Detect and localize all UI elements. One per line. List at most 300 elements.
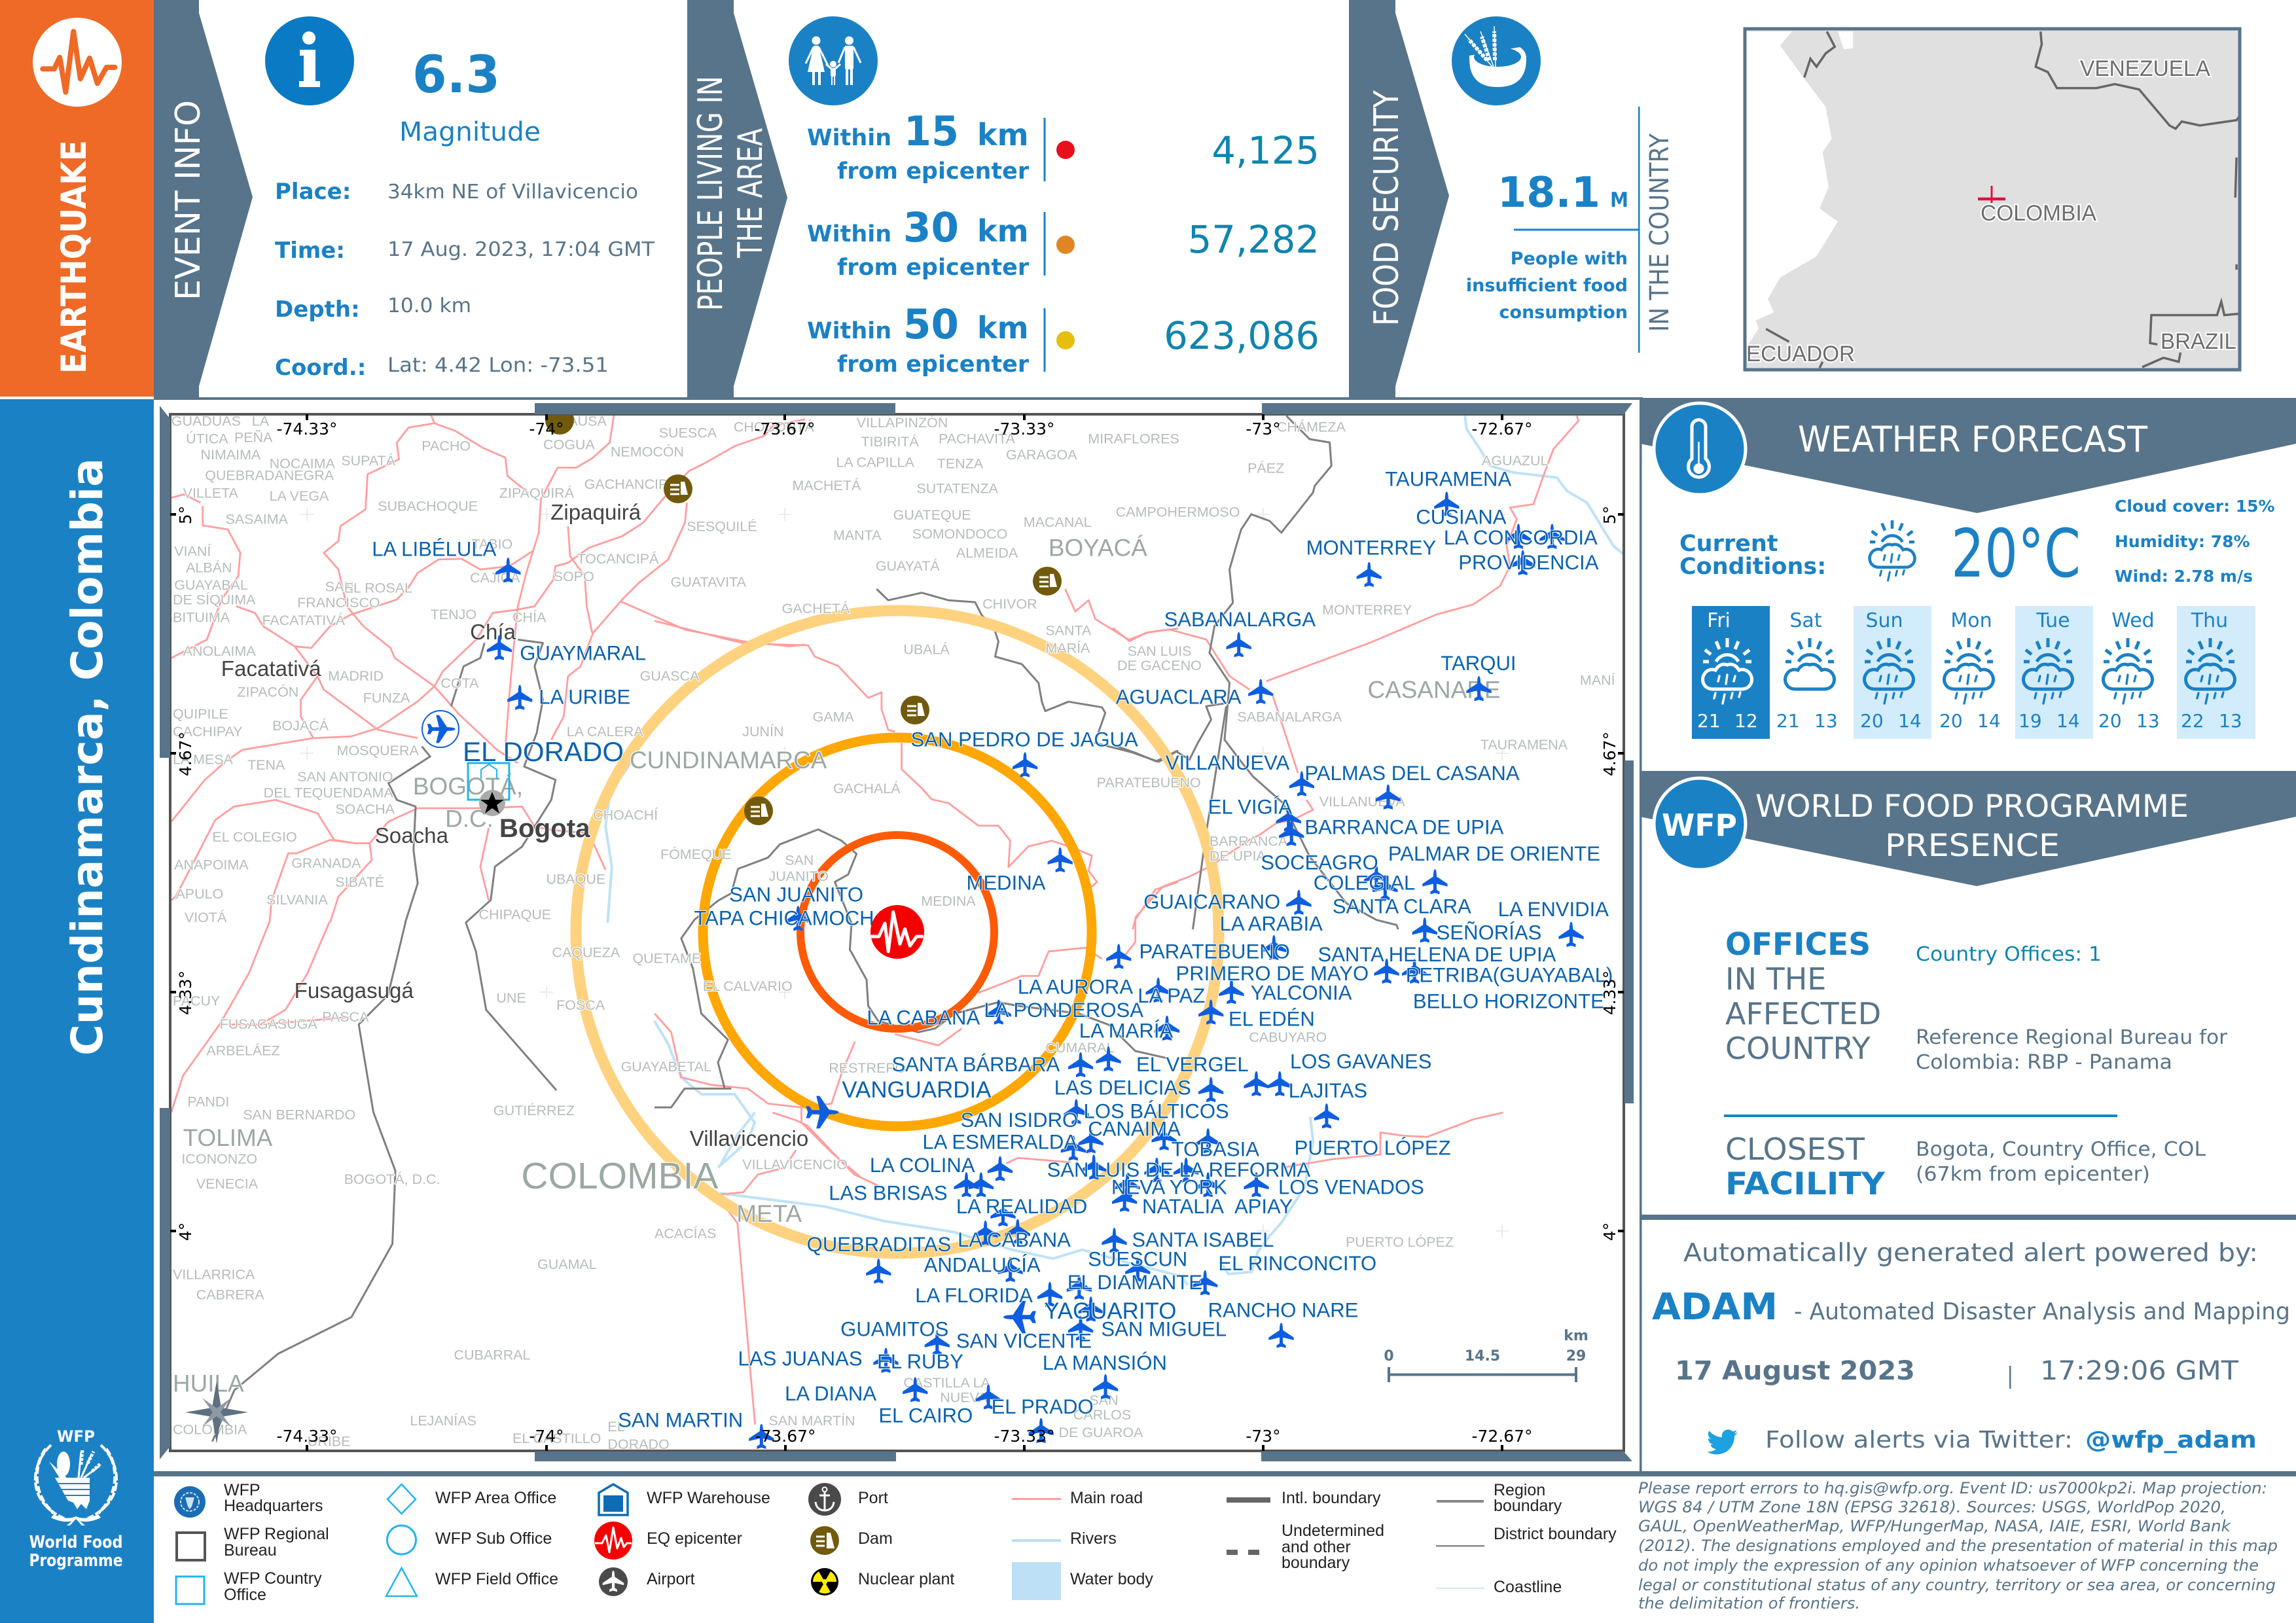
- current conditions label: Current: [1679, 531, 1778, 557]
- map labels: airports: LOS BÁLTICOS: [1084, 1099, 1229, 1122]
- food insecure value: 18.1: [1498, 169, 1600, 217]
- scale bar: 14.5: [1465, 1348, 1500, 1364]
- legend: water body: [1012, 1562, 1153, 1600]
- legend: WFP country office: [176, 1569, 322, 1604]
- roads, boundaries and rivers: centre: [655, 589, 1178, 1178]
- map labels: municipalities: ICONONZO: [181, 1151, 257, 1167]
- map labels: municipalities: SAN ANTONIO: [297, 769, 393, 785]
- map labels: airports: EL VERGEL: [1136, 1053, 1249, 1076]
- map labels: municipalities: GUTIÉRREZ: [493, 1102, 575, 1118]
- legend: WFP regional bureau: Bureau: [224, 1541, 277, 1560]
- panel: earthquake banner: [0, 0, 154, 397]
- heading banner: WFP presence: PRESENCE: [1885, 828, 2060, 864]
- map labels: municipalities: SAN MARTÍN: [769, 1412, 855, 1429]
- legend: undetermined boundary: [1227, 1522, 1384, 1572]
- map labels: municipalities: CHIVOR: [982, 596, 1037, 612]
- map labels: municipalities: PACHO: [422, 438, 471, 454]
- map labels: municipalities: RESTREPO: [829, 1060, 906, 1076]
- map labels: airports: LOS VENADOS: [1278, 1176, 1424, 1199]
- row: within 15 km: 4,125: [1211, 129, 1319, 173]
- map labels: municipalities: PÁEZ: [1247, 459, 1284, 476]
- map labels: municipalities: CAQUEZA: [552, 944, 620, 960]
- row: within 50 km: 623,086: [1164, 314, 1319, 358]
- map labels: municipalities: GUATAVITA: [671, 575, 747, 590]
- event details: Time:: [275, 238, 345, 264]
- map labels: municipalities: FACATATIVÁ: [262, 612, 346, 628]
- roads, boundaries and rivers: northwest: [171, 415, 805, 923]
- map labels: regions: HUILA: [173, 1370, 244, 1397]
- map labels: municipalities: ANOLAIMA: [183, 643, 256, 659]
- closest facility text: Bogota, Country Office, COL: [1916, 1138, 2206, 1161]
- map labels: airports: LA CABANA: [958, 1228, 1071, 1251]
- map labels: municipalities: SUBACHOQUE: [378, 498, 478, 514]
- legend: rivers: Rivers: [1070, 1529, 1117, 1548]
- coordinate ticks and labels: -73.67°: [754, 419, 816, 438]
- map labels: airports: ANDALUCÍA: [924, 1253, 1041, 1276]
- map labels: airports: LA URIBE: [539, 686, 630, 709]
- map labels: municipalities: CHÍA: [512, 609, 547, 625]
- text: follow on twitter: Follow alerts via Twitter:: [1765, 1427, 2073, 1454]
- map labels: airports: PARATEBUENO: [1139, 940, 1290, 963]
- map labels: municipalities: [171, 414, 1615, 1452]
- map labels: airports: SAN LUIS DE LA REFORMA: [1047, 1158, 1310, 1181]
- forecast: Wednesday: 20: [2098, 710, 2122, 732]
- map labels: regions: D.C.: [445, 805, 493, 832]
- map labels: municipalities: GUAYATÁ: [876, 558, 940, 574]
- map labels: regions: BOGOTÁ,: [413, 773, 523, 800]
- heading: closest facility: CLOSEST: [1725, 1132, 1865, 1167]
- row: within 15 km: [807, 107, 1319, 185]
- legend: airport: [599, 1567, 695, 1596]
- forecast: Friday: [1692, 606, 1770, 739]
- forecast: Wednesday: [2098, 609, 2160, 732]
- map labels: municipalities: SAN: [325, 579, 354, 594]
- coordinate ticks and labels: -73°: [1246, 1427, 1281, 1446]
- legend: region boundary: Region: [1494, 1481, 1545, 1499]
- map labels: airports: LA ESMERALDA: [922, 1130, 1077, 1153]
- forecast: Tuesday: 19: [2018, 710, 2042, 732]
- row: within 50 km: 50: [903, 300, 959, 348]
- map labels: municipalities: BITUIMA: [173, 609, 230, 625]
- legend: WFP area office: [387, 1484, 556, 1514]
- map labels: airports: PETRIBA(GUAYABAL): [1406, 963, 1613, 986]
- disclaimer text: WGS 84 / UTM Zone 18N (EPSG 32618). Sources: USGS, WorldPop 2020,: [1638, 1498, 2226, 1516]
- map labels: municipalities: DE GUAROA: [1058, 1425, 1143, 1440]
- row: within 30 km: 57,282: [1188, 218, 1319, 262]
- map labels: towns: Facatativá: [221, 657, 321, 681]
- inset location map: VENEZUELA: [2080, 56, 2210, 81]
- map labels: municipalities: CACHIPAY: [173, 724, 243, 740]
- map labels: municipalities: GUAMAL: [537, 1257, 597, 1272]
- disclaimer text: the delimitation of frontiers.: [1638, 1594, 1860, 1613]
- map labels: municipalities: CABRERA: [196, 1287, 264, 1303]
- map labels: airports: EL RUBY: [877, 1350, 963, 1373]
- map labels: airports: CANAIMA: [1088, 1117, 1181, 1140]
- event details: Coord.:: [275, 355, 366, 381]
- panel: weather forecast: [1640, 398, 2296, 739]
- heading: offices in the affected country: [1725, 927, 1881, 1066]
- scale bar: 29: [1566, 1348, 1586, 1364]
- map labels: municipalities: ZIPACÓN: [237, 683, 298, 700]
- map labels: municipalities: GUATEQUE: [893, 507, 971, 523]
- map labels: airports: VILLANUEVA: [1166, 751, 1290, 774]
- map labels: airports: BARRANCA DE UPIA: [1304, 816, 1504, 839]
- inset location map: COLOMBIA: [1981, 201, 2096, 226]
- map labels: municipalities: FÓMEQUE: [660, 846, 732, 863]
- map labels: municipalities: TOCANCIPÁ: [577, 550, 659, 567]
- map labels: airports: EL DIAMANTE: [1067, 1271, 1202, 1294]
- roads and boundaries: southwest: [171, 922, 556, 1442]
- map labels: municipalities: PEÑA: [234, 429, 273, 445]
- food insecure description: People with: [1511, 249, 1628, 269]
- map labels: municipalities: EL CASTILLO: [512, 1431, 601, 1446]
- map labels: municipalities: UBALÁ: [903, 641, 950, 658]
- map labels: regions: CASANARE: [1368, 677, 1501, 704]
- map labels: airports: SAN MARTIN: [618, 1408, 743, 1431]
- map labels: municipalities: VILLETA: [183, 485, 239, 501]
- text: time: 17:29:06 GMT: [2040, 1356, 2239, 1386]
- map labels: municipalities: PASCA: [322, 1009, 369, 1025]
- row: within 30 km: 30: [903, 204, 959, 251]
- legend: WFP regional bureau: WFP Regional: [224, 1525, 329, 1543]
- map labels: municipalities: PACUY: [173, 993, 220, 1008]
- legend: port: Port: [858, 1489, 888, 1507]
- map labels: airports: GUAMITOS: [840, 1318, 948, 1341]
- heading: people living in the area: [691, 76, 770, 311]
- legend: rivers: [1012, 1529, 1117, 1548]
- text: date: 17 August 2023: [1675, 1356, 1915, 1386]
- heading: food security: FOOD SECURITY: [1367, 90, 1407, 326]
- weather details: Wind: 2.78 m/s: [2115, 567, 2253, 586]
- legend: region boundary: boundary: [1494, 1497, 1562, 1515]
- map labels: airports: [372, 467, 1613, 1431]
- map labels: airports: SANTA ISABEL: [1132, 1228, 1274, 1251]
- map labels: airports: NEVA YORK: [1111, 1176, 1227, 1199]
- label: in the country: IN THE COUNTRY: [1645, 134, 1675, 332]
- coordinate ticks and labels: -73.67°: [755, 1427, 816, 1446]
- panel: people living in the area: [687, 0, 1319, 397]
- row: within 30 km: Within: [807, 221, 891, 247]
- coordinate ticks and labels: 4.33°: [176, 971, 195, 1015]
- map labels: municipalities: UBAQUE: [546, 872, 605, 887]
- legend: main road: Main road: [1070, 1489, 1143, 1507]
- legend: WFP field office: WFP Field Office: [435, 1570, 558, 1588]
- legend: WFP warehouse: WFP Warehouse: [647, 1489, 770, 1507]
- logo: World Food Programme: WFP: [57, 1427, 95, 1446]
- map labels: municipalities: CUMARAL: [1045, 1040, 1114, 1056]
- forecast: Monday: 14: [1977, 710, 2001, 732]
- map labels: airports: LA PONDEROSA: [984, 999, 1143, 1022]
- map labels: airports: PRIMERO DE MAYO: [1175, 962, 1369, 985]
- forecast: Saturday: [1776, 609, 1838, 732]
- map labels: municipalities: NEMOCÓN: [611, 444, 684, 460]
- coordinate ticks and labels: -73.33°: [994, 419, 1055, 438]
- map labels: airports: CUSIANA: [1416, 506, 1507, 529]
- map labels: airports: SEÑORÍAS: [1437, 921, 1541, 944]
- map labels: towns: [221, 501, 808, 1151]
- forecast: Monday: 20: [1939, 710, 1963, 732]
- map labels: towns: Fusagasugá: [295, 979, 414, 1003]
- map labels: municipalities: PANDI: [187, 1094, 229, 1110]
- map labels: airports: GUAYMARAL: [520, 642, 646, 665]
- map labels: municipalities: MANTA: [833, 527, 882, 543]
- legend: main road: [1012, 1489, 1143, 1507]
- map labels: airports: NATALIA: [1142, 1195, 1224, 1218]
- panel: ADAM alert: [1652, 1238, 2290, 1454]
- map labels: municipalities: LA CALERA: [567, 724, 643, 740]
- heading: earthquake: EARTHQUAKE: [54, 140, 94, 374]
- icon: current weather: [1870, 520, 1914, 580]
- map labels: municipalities: ALBÁN: [186, 559, 232, 575]
- event details: Lat: 4.42 Lon: -73.51: [387, 354, 609, 377]
- map labels: municipalities: PUERTO LÓPEZ: [1346, 1234, 1454, 1250]
- icon: WFP badge: [1654, 778, 1746, 870]
- map labels: municipalities: LA VEGA: [270, 488, 329, 504]
- map labels: municipalities: MIRAFLORES: [1088, 431, 1179, 447]
- heading: closest facility: [1725, 1132, 1886, 1202]
- map labels: municipalities: MOSQUERA: [337, 743, 420, 758]
- map labels: municipalities: DE SÍQUIMA: [173, 592, 256, 608]
- map labels: municipalities: NIMAIMA: [200, 447, 261, 463]
- icon: information: [265, 16, 354, 105]
- regional bureau text: Colombia: RBP - Panama: [1916, 1051, 2172, 1074]
- map labels: towns: Soacha: [375, 824, 449, 848]
- coordinate ticks and labels: -74°: [529, 419, 564, 438]
- map labels: airports: SANTA HELENA DE UPIA: [1318, 943, 1556, 966]
- map labels: municipalities: DE GACENO: [1117, 658, 1202, 673]
- map labels: municipalities: MARÍA: [1045, 639, 1090, 656]
- coordinate ticks and labels: -74°: [529, 1427, 564, 1446]
- map labels: municipalities: VILLARRICA: [173, 1266, 255, 1282]
- legend: WFP area office: WFP Area Office: [435, 1489, 556, 1507]
- map labels: airports: BELLO HORIZONTE: [1413, 990, 1604, 1013]
- map labels: municipalities: EL: [607, 1419, 625, 1435]
- map labels: municipalities: MACANAL: [1024, 514, 1092, 530]
- map labels: airports: VANGUARDIA: [842, 1077, 992, 1103]
- map labels: airports: LOS GAVANES: [1290, 1050, 1431, 1073]
- map labels: airports: LA COLINA: [870, 1154, 975, 1177]
- map labels: municipalities: SILVANIA: [266, 892, 328, 908]
- map labels: municipalities: COGUA: [543, 437, 595, 453]
- icons: dams: [545, 406, 1062, 825]
- row: within 15 km: 15: [904, 107, 959, 155]
- text: ADAM description: - Automated Disaster Analysis and Mapping: [1794, 1298, 2290, 1325]
- map labels: municipalities: JUNÍN: [742, 723, 783, 740]
- map labels: municipalities: GUAYABETAL: [621, 1059, 711, 1075]
- map labels: municipalities: EL CALVARIO: [703, 978, 793, 994]
- legend: district boundary: District boundary: [1494, 1525, 1617, 1543]
- map labels: municipalities: COTA: [440, 675, 479, 691]
- coordinate ticks and labels: -73°: [1246, 419, 1281, 438]
- map labels: airports: SAN MIGUEL: [1101, 1318, 1227, 1341]
- legend: coastline: Coastline: [1494, 1578, 1562, 1596]
- legend: WFP headquarters: WFP: [224, 1481, 260, 1499]
- forecast: Friday: 12: [1734, 710, 1758, 732]
- forecast: Wednesday: 13: [2136, 710, 2160, 732]
- coordinate ticks and labels: -74.33°: [276, 1427, 338, 1446]
- heading banner: WFP presence: [1640, 771, 2296, 886]
- map labels: municipalities: FUNZA: [363, 690, 410, 705]
- forecast: Tuesday: Tue: [2036, 609, 2070, 632]
- map labels: municipalities: CAJICÁ: [470, 569, 520, 586]
- event details: [275, 179, 655, 381]
- legend: WFP country office: Office: [224, 1586, 266, 1604]
- map labels: municipalities: COLOMBIA: [173, 1421, 247, 1437]
- map labels: municipalities: QUETAME: [632, 950, 701, 966]
- map labels: municipalities: AGUAZUL: [1482, 453, 1549, 469]
- map labels: airports: PALMAS DEL CASANA: [1304, 762, 1520, 785]
- map labels: airports: LA REALIDAD: [956, 1195, 1087, 1218]
- heading: location: Cundinamarca, Colombia: [62, 458, 113, 1056]
- heading: offices in the affected country: OFFICES: [1725, 927, 1871, 963]
- closest facility text: (67km from epicenter): [1916, 1163, 2150, 1186]
- map labels: airports: LAJITAS: [1289, 1079, 1367, 1102]
- legend: dam: [810, 1526, 893, 1555]
- map labels: towns: Villavicencio: [690, 1127, 808, 1151]
- icon: thermometer: [1654, 403, 1746, 495]
- text: generated by: Automatically generated alert powered by:: [1683, 1238, 2258, 1267]
- map labels: municipalities: MADRID: [328, 668, 384, 684]
- map labels: airports: SAN JUANITO: [729, 883, 863, 906]
- map frame: [170, 414, 1624, 1451]
- map labels: municipalities: EL COLEGIO: [212, 829, 297, 845]
- forecast: Wednesday: Wed: [2111, 609, 2155, 632]
- map labels: regions: COLOMBIA: [521, 1155, 718, 1197]
- legend: WFP sub office: WFP Sub Office: [435, 1529, 552, 1548]
- forecast: Saturday: 21: [1776, 710, 1800, 732]
- map labels: municipalities: EL ROSAL: [344, 580, 412, 596]
- map labels: municipalities: NUEVA: [940, 1389, 988, 1405]
- map labels: municipalities: SUPATÁ: [341, 452, 396, 469]
- map labels: municipalities: MACHETÁ: [792, 477, 861, 493]
- map labels: airports: AGUACLARA: [1116, 686, 1242, 709]
- coordinate ticks and labels: 4°: [1600, 1222, 1619, 1241]
- map labels: airports: SAN PEDRO DE JAGUA: [911, 728, 1138, 751]
- map labels: municipalities: TIBIRITÁ: [861, 433, 919, 450]
- map labels: municipalities: CABUYARO: [1249, 1029, 1327, 1045]
- map labels: airports: LA ENVIDIA: [1498, 898, 1609, 921]
- map labels: airports: LAS BRISAS: [829, 1182, 948, 1205]
- food insecure description: consumption: [1499, 302, 1628, 323]
- map labels: airports: LA ARABIA: [1220, 912, 1323, 935]
- inset location map: ECUADOR: [1746, 342, 1855, 366]
- coordinate ticks and labels: 4.33°: [1600, 971, 1619, 1015]
- current conditions label: Conditions:: [1679, 554, 1826, 580]
- food insecure description: insufficient food: [1466, 276, 1628, 296]
- map labels: regions: CUNDINAMARCA: [630, 747, 827, 774]
- map labels: municipalities: FRANCISCO: [297, 595, 380, 611]
- icon: earthquake waveform: [33, 18, 122, 107]
- legend: nuclear plant: [811, 1568, 954, 1596]
- map labels: municipalities: ALMEIDA: [956, 545, 1018, 561]
- forecast: Tuesday: [2015, 606, 2093, 739]
- coordinate ticks and labels: -73.33°: [994, 1427, 1055, 1446]
- map labels: municipalities: SANTA: [1045, 623, 1092, 639]
- heading: closest facility: FACILITY: [1725, 1166, 1886, 1202]
- heading banner: WFP presence: WORLD FOOD PROGRAMME: [1755, 789, 2189, 825]
- map labels: regions: TOLIMA: [183, 1124, 273, 1151]
- map labels: municipalities: TENA: [247, 757, 285, 773]
- map labels: municipalities: DE UPIA: [1210, 848, 1266, 864]
- legend: WFP country office: WFP Country: [224, 1569, 322, 1588]
- map labels: municipalities: BOJACÁ: [272, 717, 329, 734]
- map labels: municipalities: SOMONDOCO: [912, 526, 1007, 542]
- legend: nuclear plant: Nuclear plant: [858, 1570, 954, 1588]
- map labels: municipalities: FOSCA: [556, 997, 605, 1013]
- forecast: Friday: Fri: [1707, 609, 1731, 632]
- food insecure value: M: [1610, 188, 1628, 212]
- roads and rivers: south: [720, 1113, 1503, 1425]
- map labels: municipalities: LA: [252, 414, 270, 429]
- map labels: municipalities: TENJO: [431, 607, 476, 622]
- row: within 50 km: Within: [807, 318, 891, 344]
- map labels: towns: Chía: [470, 620, 516, 645]
- map labels: airports: YALCONIA: [1251, 981, 1352, 1004]
- map labels: municipalities: LA CAPILLA: [836, 454, 914, 470]
- map labels: municipalities: VILLAVICENCIO: [742, 1157, 848, 1173]
- map labels: airports: LA MANSIÓN: [1043, 1351, 1167, 1374]
- row: within 15 km: km: [977, 117, 1029, 152]
- map labels: airports: EL RINCONCITO: [1218, 1252, 1376, 1275]
- event details: 10.0 km: [387, 294, 471, 317]
- map labels: airports: COLEGIAL: [1314, 872, 1415, 895]
- map labels: airports: SAN VICENTE: [956, 1330, 1092, 1353]
- row: within 50 km: km: [977, 310, 1029, 346]
- map labels: regions: BOYACÁ: [1049, 535, 1147, 562]
- disclaimer text: do not imply the expression of any opinion whatsoever of WFP concerning the: [1638, 1556, 2259, 1575]
- legend: airport: Airport: [647, 1570, 695, 1588]
- icon: bowl with wheat: [1452, 16, 1541, 105]
- map labels: municipalities: GUAYABAL: [174, 577, 248, 593]
- map labels: airports: RANCHO NARE: [1208, 1299, 1358, 1322]
- map labels: municipalities: TAURAMENA: [1480, 737, 1568, 753]
- forecast: Friday: 21: [1697, 710, 1721, 732]
- coordinate ticks and labels: 4°: [176, 1222, 195, 1241]
- map labels: municipalities: CASTILLA LA: [903, 1375, 991, 1391]
- map labels: municipalities: VIANÍ: [174, 543, 211, 560]
- logo: World Food Programme: World Food: [29, 1533, 123, 1552]
- map labels: airports: LAS DELICIAS: [1054, 1077, 1191, 1099]
- map labels: municipalities: NOCAIMA: [270, 456, 336, 472]
- map labels: municipalities: GACHANCIPÁ: [584, 476, 677, 492]
- map labels: airports: LA FLORIDA: [915, 1284, 1033, 1307]
- scale bar: km: [1564, 1328, 1588, 1344]
- coordinate ticks and labels: -72.67°: [1471, 419, 1533, 438]
- disclaimer text: (2012). The designations employed and the presentation of material in this map: [1638, 1537, 2278, 1555]
- map labels: municipalities: ZIPAQUIRÁ: [499, 484, 575, 501]
- forecast: Sunday: Sun: [1865, 609, 1903, 632]
- heading banner: weather forecast: [1640, 398, 2296, 513]
- map labels: municipalities: SUESCA: [659, 425, 717, 441]
- heading: people living in the area: PEOPLE LIVING IN: [691, 76, 730, 311]
- map labels: municipalities: APULO: [175, 886, 223, 902]
- map labels: municipalities: ACACÍAS: [655, 1225, 716, 1241]
- regional bureau text: Reference Regional Bureau for: [1916, 1026, 2228, 1049]
- forecast: Sunday: [1854, 606, 1931, 739]
- map labels: municipalities: GUADUAS: [171, 414, 241, 429]
- map labels: municipalities: MANÍ: [1580, 672, 1615, 688]
- map labels: municipalities: GAMA: [813, 709, 855, 724]
- map labels: municipalities: UNE: [496, 990, 526, 1006]
- icon: family: [789, 16, 878, 105]
- map labels: towns: Zipaquirá: [550, 501, 641, 525]
- map labels: airports: LA MARÍA: [1079, 1019, 1173, 1042]
- map labels: municipalities: CAMPOHERMOSO: [1116, 504, 1240, 520]
- map labels: municipalities: SASAIMA: [226, 512, 289, 527]
- map labels: municipalities: SOACHA: [335, 801, 395, 817]
- map labels: municipalities: DORADO: [607, 1436, 670, 1452]
- forecast: Tuesday: 14: [2056, 710, 2080, 732]
